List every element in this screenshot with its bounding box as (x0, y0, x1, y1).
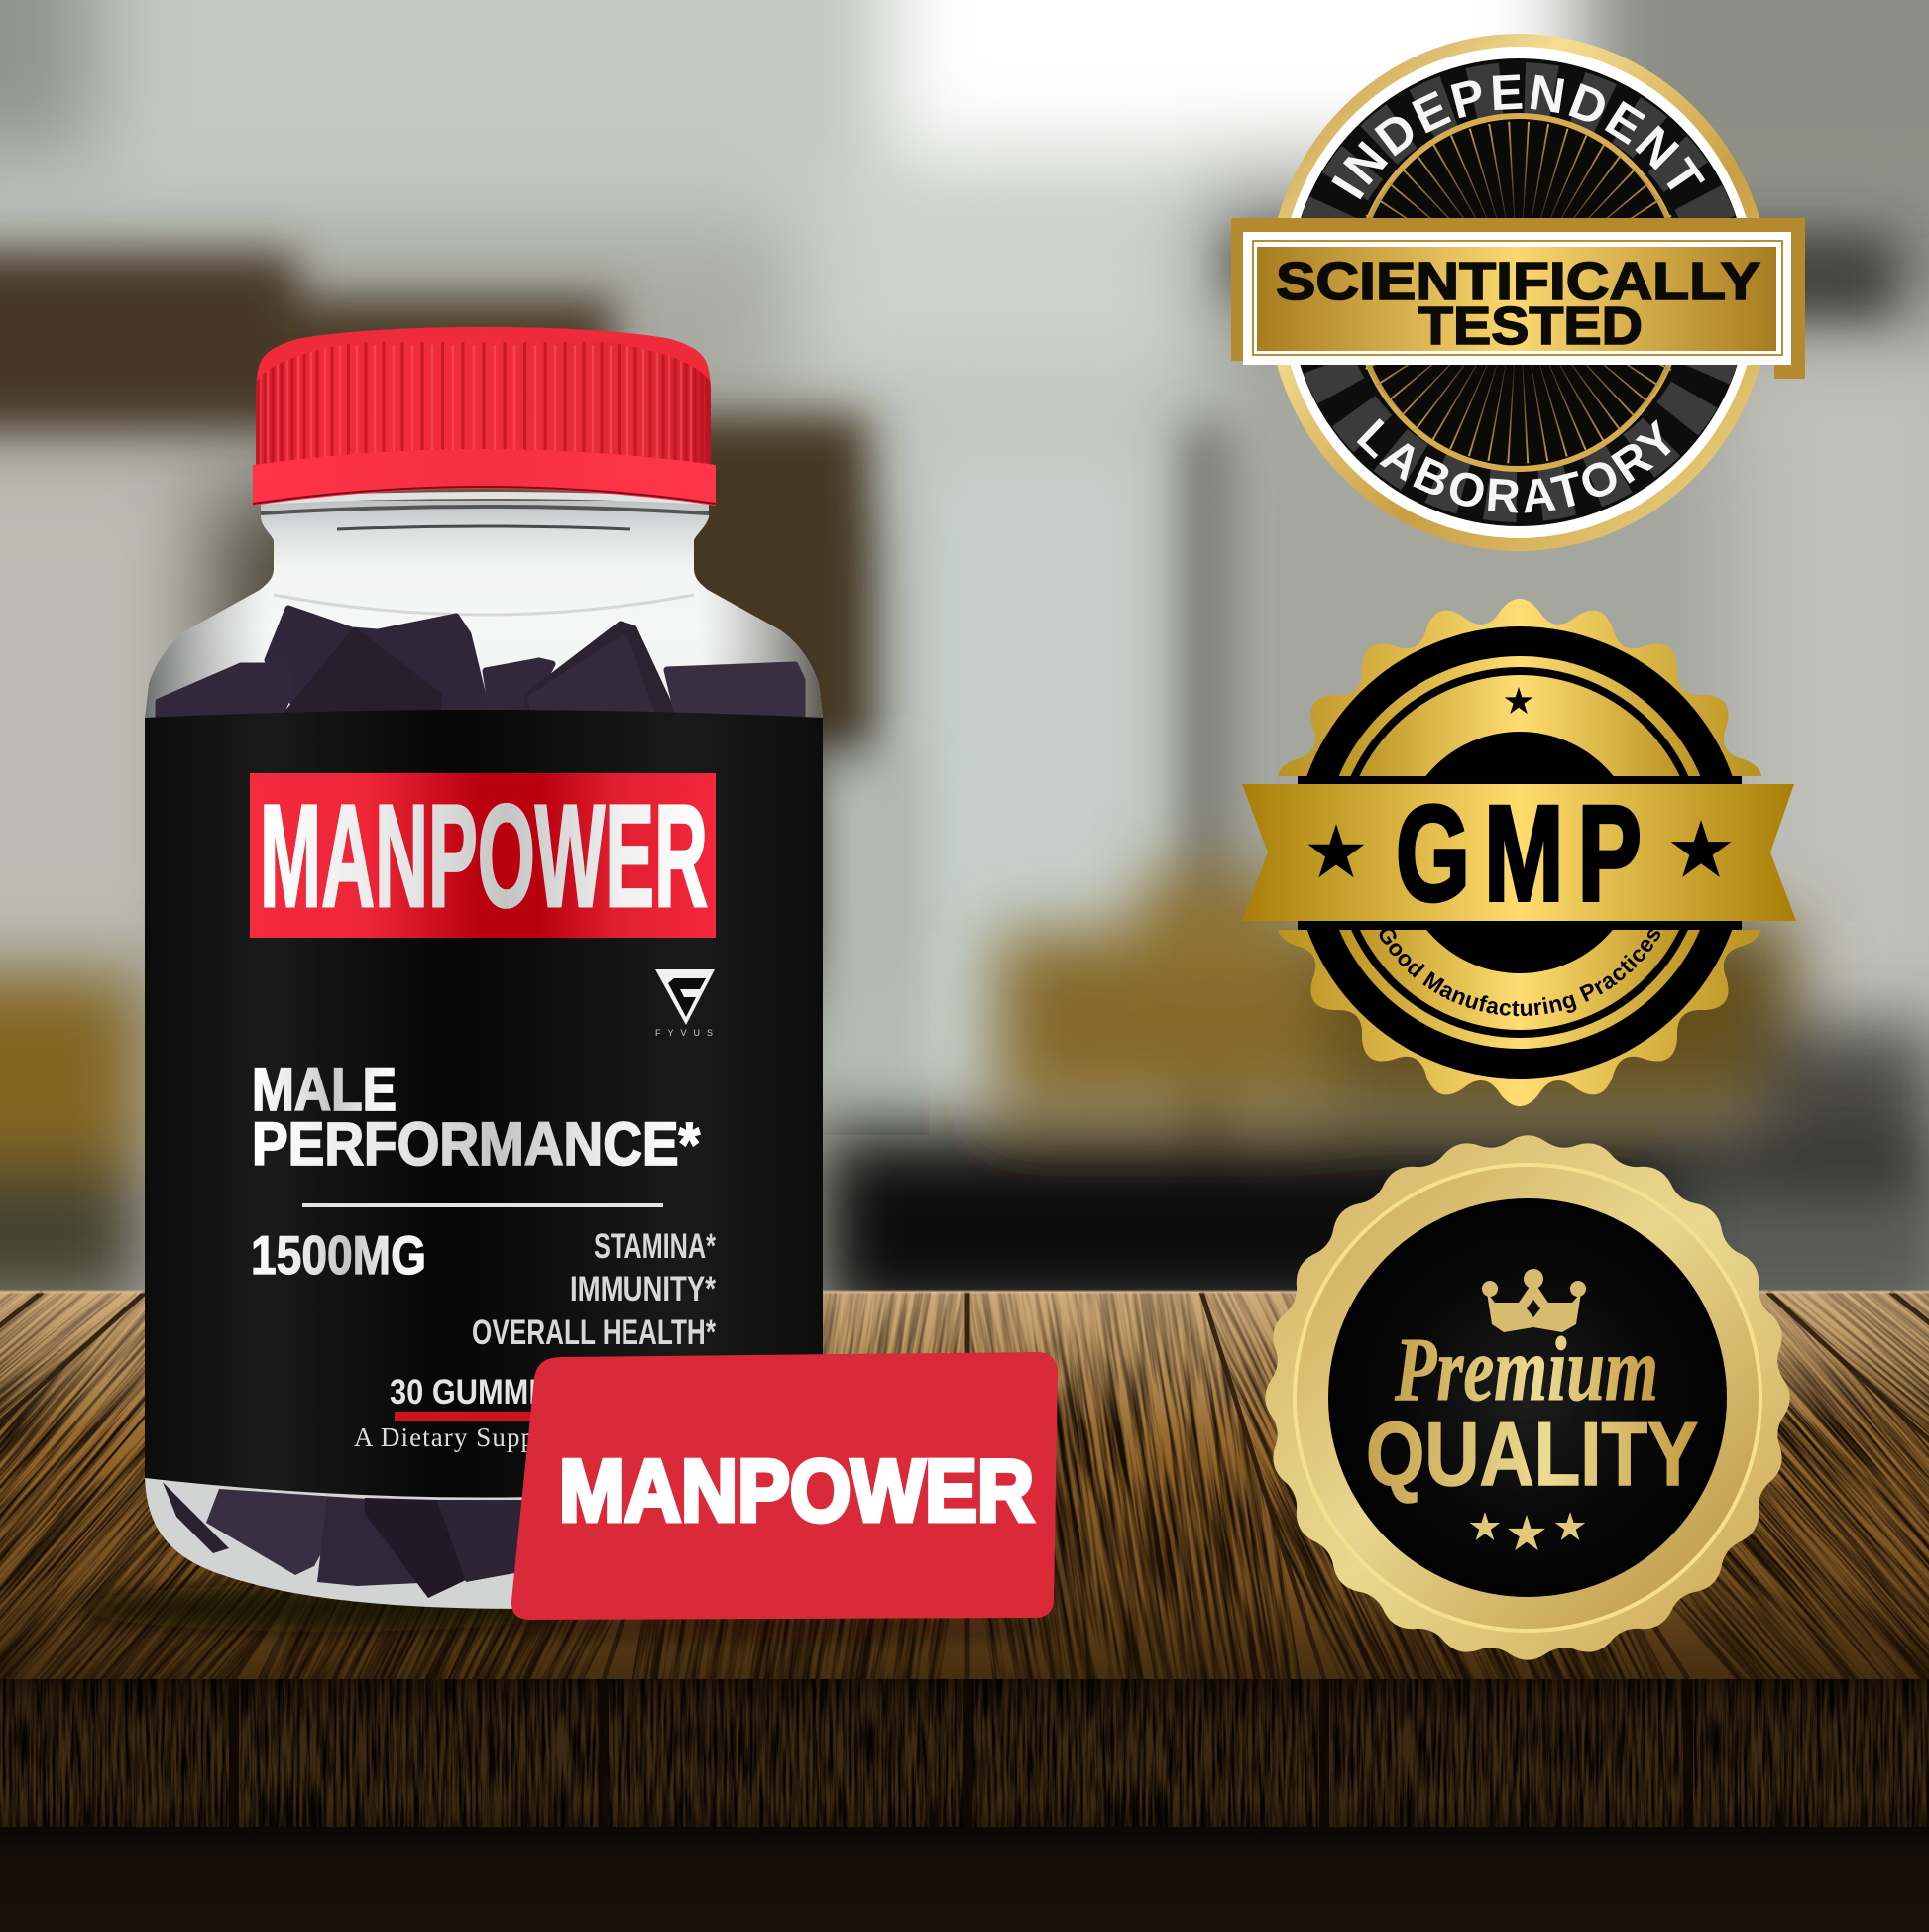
banner text: SCIENTIFICALLY (1276, 252, 1760, 311)
red logo box (250, 773, 716, 938)
red underline (395, 1412, 573, 1421)
wooden table top (0, 1292, 1929, 1680)
badge: GMP (1242, 599, 1796, 1106)
FYVUS logo (655, 969, 720, 1038)
gummies top (159, 609, 802, 718)
count: 30 GUMMIES (390, 1373, 578, 1412)
independent curved text: INDEPENDENT (1331, 74, 1705, 200)
brand name: MANPOWER (260, 775, 708, 938)
benefits list: OVERALL HEALTH* (472, 1313, 716, 1352)
three stars (1470, 1512, 1585, 1550)
good manufacturing practices curved text: Good Manufacturing Practices (1380, 930, 1660, 1017)
ribbon (1242, 784, 1796, 921)
banner (1231, 218, 1805, 379)
supplement line: A Dietary Supplement (354, 1422, 614, 1452)
FYVUS logo: FYVUS (655, 1028, 720, 1038)
product heading: PERFORMANCE* (252, 1110, 700, 1178)
dosage: 1500MG (251, 1224, 426, 1286)
card brand name: MANPOWER (559, 1441, 1034, 1539)
bottle cap (253, 327, 716, 506)
bottle base glass (145, 1472, 694, 1609)
badge: independent laboratory (1231, 34, 1805, 551)
supplement bottle (145, 327, 823, 1609)
black label (145, 710, 823, 1497)
ribbon star right (1671, 820, 1731, 877)
blurred room background (0, 0, 1929, 1323)
product heading (252, 1056, 700, 1178)
red card (511, 1352, 1058, 1620)
product heading: MALE (252, 1056, 397, 1123)
ribbon star left (1307, 824, 1365, 877)
top star (1505, 687, 1532, 714)
benefits list: IMMUNITY* (570, 1270, 716, 1308)
laboratory curved text: LABORATORY (1356, 418, 1671, 513)
banner: TESTED (1418, 296, 1643, 356)
premium script: Premium (1394, 1318, 1658, 1420)
crown (1482, 1269, 1586, 1332)
divider (302, 1203, 663, 1207)
quality: QUALITY (1366, 1405, 1698, 1505)
table underside shadow (0, 1827, 1929, 1932)
GMP text: GMP (1396, 778, 1655, 930)
bottle and card shadow (79, 1388, 1071, 1638)
wooden table front edge (0, 1679, 1929, 1828)
badge: premium quality (1265, 1135, 1790, 1660)
benefits list: STAMINA* (594, 1227, 716, 1266)
bottle glass shoulder and neck (145, 496, 823, 718)
benefits list (472, 1227, 716, 1352)
